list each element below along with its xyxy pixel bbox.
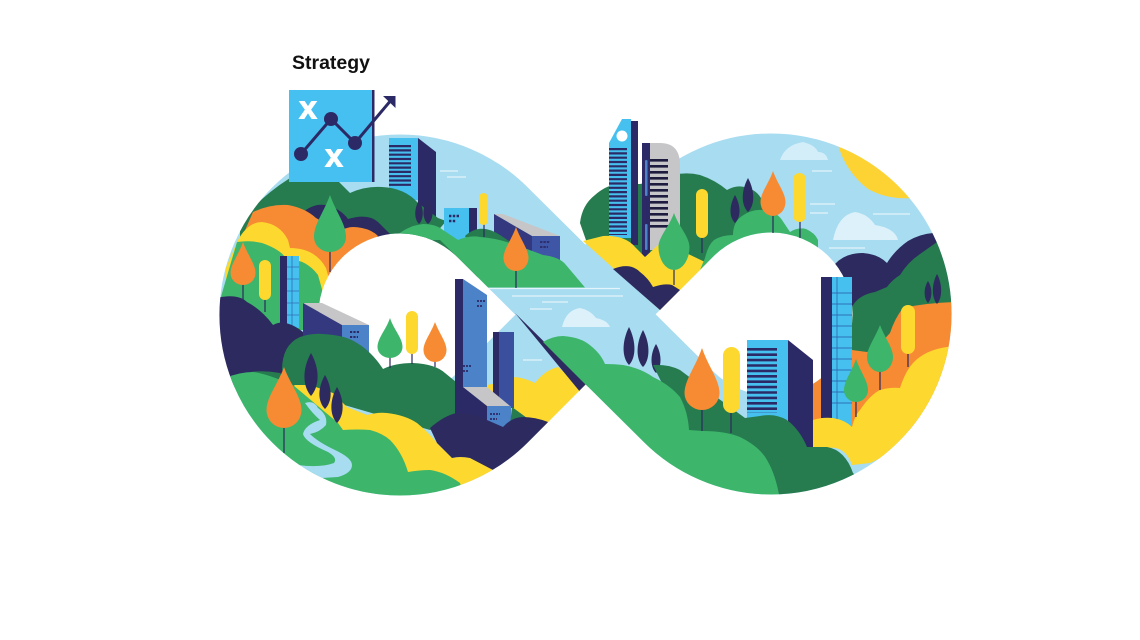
- hill: lower left dark green: [282, 334, 456, 430]
- tree: navy leaf: [304, 353, 318, 396]
- tree: orange centre: [424, 322, 446, 362]
- crossing shadow wedge: [515, 313, 589, 393]
- tree: big orange lower centre: [684, 348, 720, 410]
- heading: Strategy: Strategy: [292, 52, 370, 74]
- hill: lower yellow: [294, 385, 493, 485]
- hills: right lobe rear: [813, 233, 960, 430]
- building: left grey roof block: [303, 303, 369, 365]
- tree: yellow pill left: [259, 260, 271, 300]
- building: lower right block: [747, 340, 813, 450]
- building: centre grey roof block: [455, 387, 511, 430]
- building: centre tall tower: [455, 279, 487, 419]
- icon: leaf tree: [638, 330, 648, 367]
- cloud in crossing: [562, 308, 610, 327]
- hill: left navy: [219, 296, 303, 385]
- cloud upper right: [780, 142, 828, 160]
- chart marker x: x: [299, 90, 317, 126]
- building: centre slim tower: [493, 332, 514, 408]
- tree: big orange lower left: [266, 367, 302, 428]
- building: small blue block: [444, 208, 477, 240]
- icon: strategy chart board: [289, 90, 396, 182]
- infographic canvas: [219, 56, 952, 496]
- hill: lower right light green: [543, 336, 780, 500]
- tree: green right: [867, 325, 893, 372]
- hills: navy leaves on crossing: [624, 327, 660, 373]
- building: small left tower: [280, 256, 299, 328]
- building: top right grey tower: [642, 143, 680, 257]
- icon: river: [298, 402, 352, 478]
- chart marker x: x: [325, 138, 343, 174]
- tree: navy leaf: [424, 199, 432, 224]
- icon: sun: [838, 146, 910, 198]
- tree: yellow pill top right: [793, 173, 806, 222]
- tree: navy leaf: [331, 387, 343, 423]
- tree: orange top centre: [504, 227, 528, 271]
- tree: navy leaf: [925, 281, 931, 303]
- tree: orange top right: [760, 171, 786, 216]
- hill: right dark green: [852, 242, 952, 352]
- hill: top right dark green: [580, 173, 770, 285]
- hill: top right navy: [613, 266, 680, 310]
- hill: top right light green: [700, 210, 818, 270]
- crossing band and its details: [400, 162, 636, 434]
- tree: green right of towers: [658, 213, 690, 270]
- tree: navy leaf: [415, 200, 423, 224]
- tree: navy leaf: [319, 375, 331, 409]
- infinity background: sky and rear scenery: [219, 134, 952, 496]
- icon: leaf tree: [652, 344, 660, 373]
- icon: leaf tree: [624, 327, 634, 365]
- cloud middle right: [833, 212, 898, 240]
- tree: yellow pill centre: [406, 311, 418, 354]
- hill: lower left light green: [220, 372, 465, 500]
- tree: yellow pill right: [901, 305, 915, 354]
- hill: top left dark green: [240, 178, 478, 278]
- hill: left green: [220, 241, 325, 330]
- tree: green centre: [378, 318, 402, 358]
- crossing streak lines: [488, 288, 623, 309]
- hill: navy ridge: [305, 204, 390, 237]
- hill: right navy: [835, 233, 937, 307]
- building: top right blue tower: [609, 119, 638, 245]
- hill: top centre green: [392, 224, 585, 288]
- trees: [230, 171, 941, 453]
- hill: orange: [245, 204, 378, 276]
- tree trunks: [243, 214, 908, 453]
- hill: lower centre yellow: [484, 367, 582, 430]
- sky streak lines: [440, 171, 910, 360]
- building: grey roof block: [494, 214, 560, 262]
- sky band crossing: [440, 162, 636, 434]
- hill: top right yellow: [583, 236, 707, 310]
- tree: green top left: [314, 195, 346, 252]
- tree: navy leaf: [933, 274, 941, 304]
- hill: dark green sliver: [250, 371, 295, 386]
- tree: orange left: [230, 242, 256, 285]
- tree: yellow pill lower centre: [723, 347, 740, 413]
- hills: lower right band: [543, 336, 860, 500]
- tree: navy leaf: [730, 195, 740, 223]
- building: right tall tower: [821, 277, 852, 430]
- hill: lower right dark green: [653, 365, 860, 500]
- hill: dark green behind: [465, 228, 510, 243]
- tree: yellow pill top centre: [479, 193, 488, 225]
- tree: yellow pill: [696, 189, 708, 238]
- building: top left tower: [389, 138, 436, 220]
- tree: navy leaf: [743, 178, 753, 212]
- hill: right orange: [813, 302, 960, 430]
- tree: green lower right: [844, 359, 868, 402]
- hill: right yellow: [813, 347, 960, 465]
- hill: small dark green: [510, 407, 526, 421]
- hill: yellow: [225, 222, 328, 291]
- hills: lower left foreground: [220, 371, 548, 500]
- chart trend line with arrow: [294, 96, 396, 161]
- hill: lower navy: [430, 413, 548, 470]
